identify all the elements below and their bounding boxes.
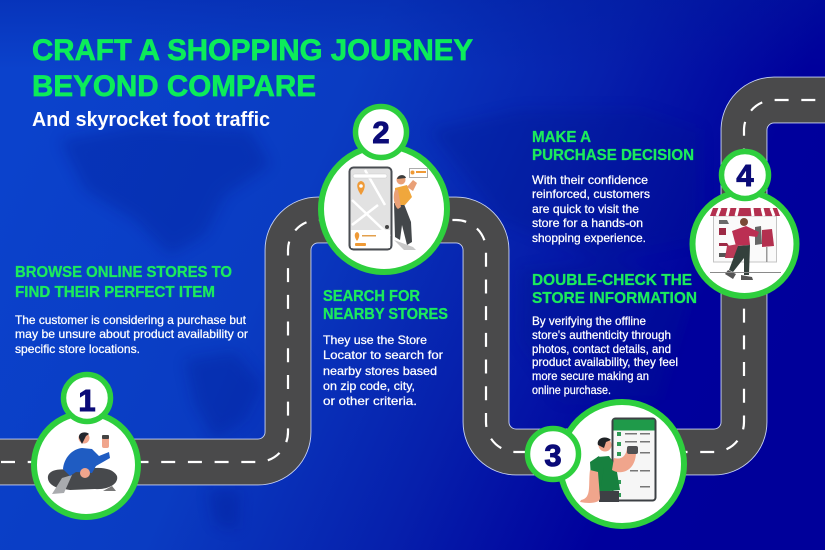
text block: search for nearby stores: SEARCH FOR xyxy=(323,288,420,305)
text block: double-check the store information: By verifying the offline xyxy=(532,314,646,328)
text block: double-check the store information: photos, contact details, and xyxy=(532,342,671,356)
person with orange shirt xyxy=(394,175,417,250)
number 3: 3 xyxy=(544,438,562,473)
text block: make a purchase decision: reinforced, customers xyxy=(532,187,650,201)
number 2: 2 xyxy=(372,115,390,150)
text block: search for nearby stores xyxy=(323,288,448,408)
icon: person on skateboard with phone xyxy=(48,432,117,494)
text block: browse online stores: specific store locations. xyxy=(15,342,140,356)
step 3 badge xyxy=(528,402,684,526)
text block: make a purchase decision: PURCHASE DECISION xyxy=(532,147,694,164)
text block: make a purchase decision: are quick to visit the xyxy=(532,202,639,216)
text block: double-check the store information xyxy=(532,272,697,397)
world map silhouette xyxy=(60,110,700,530)
icon: shopper in front of store xyxy=(710,208,781,280)
text block: make a purchase decision: MAKE A xyxy=(532,129,591,146)
text block: double-check the store information: store's authenticity through xyxy=(532,328,671,342)
step 3 number circle xyxy=(528,428,578,480)
text block: browse online stores: BROWSE ONLINE STORES TO xyxy=(15,264,232,281)
step 1 badge xyxy=(34,374,138,517)
title xyxy=(32,34,473,103)
title: CRAFT A SHOPPING JOURNEY xyxy=(32,34,473,67)
road xyxy=(0,100,825,462)
text block: double-check the store information: DOUBLE-CHECK THE xyxy=(532,272,692,289)
step 4 illustration circle xyxy=(692,192,796,296)
title: BEYOND COMPARE xyxy=(32,70,316,103)
text block: search for nearby stores: Locator to search for xyxy=(323,348,443,362)
text block: double-check the store information: product availability, they feel xyxy=(532,355,678,369)
text block: make a purchase decision: store for a hands-on xyxy=(532,216,643,230)
text block: search for nearby stores: on zip code, city, xyxy=(323,379,415,393)
text block: browse online stores: may be unsure about product availability or xyxy=(15,327,248,341)
step 2 illustration circle xyxy=(321,146,447,272)
step 1 number circle xyxy=(64,374,110,422)
review bubble xyxy=(410,168,428,178)
step 1 illustration circle xyxy=(34,413,138,517)
number 4: 4 xyxy=(736,158,754,193)
text block: search for nearby stores: nearby stores based xyxy=(323,364,437,378)
text block: double-check the store information: STORE INFORMATION xyxy=(532,290,697,307)
step 2 number circle xyxy=(356,106,406,158)
text block: browse online stores: The customer is considering a purchase but xyxy=(15,313,247,327)
text block: browse online stores: FIND THEIR PERFECT ITEM xyxy=(15,284,215,301)
text block: search for nearby stores: NEARBY STORES xyxy=(323,306,448,323)
step 3 illustration circle xyxy=(560,402,684,526)
icon: person with shopping app on phone xyxy=(580,418,656,503)
text block: double-check the store information: more secure making an xyxy=(532,369,649,383)
text block: search for nearby stores: or other criteria. xyxy=(323,394,417,408)
text block: make a purchase decision: shopping experience. xyxy=(532,231,646,245)
text block: make a purchase decision xyxy=(532,129,694,245)
text block: make a purchase decision: With their confidence xyxy=(532,173,648,187)
number 1: 1 xyxy=(78,383,96,418)
text block: double-check the store information: online purchase. xyxy=(532,383,611,397)
step 4 badge xyxy=(692,152,796,296)
subtitle: And skyrocket foot traffic xyxy=(32,109,270,131)
text block: search for nearby stores: They use the Store xyxy=(323,333,427,347)
step 2 badge xyxy=(321,106,447,272)
icon: phone with store locator map xyxy=(350,168,428,250)
step 4 number circle xyxy=(722,152,768,198)
text block: browse online stores xyxy=(15,264,248,356)
